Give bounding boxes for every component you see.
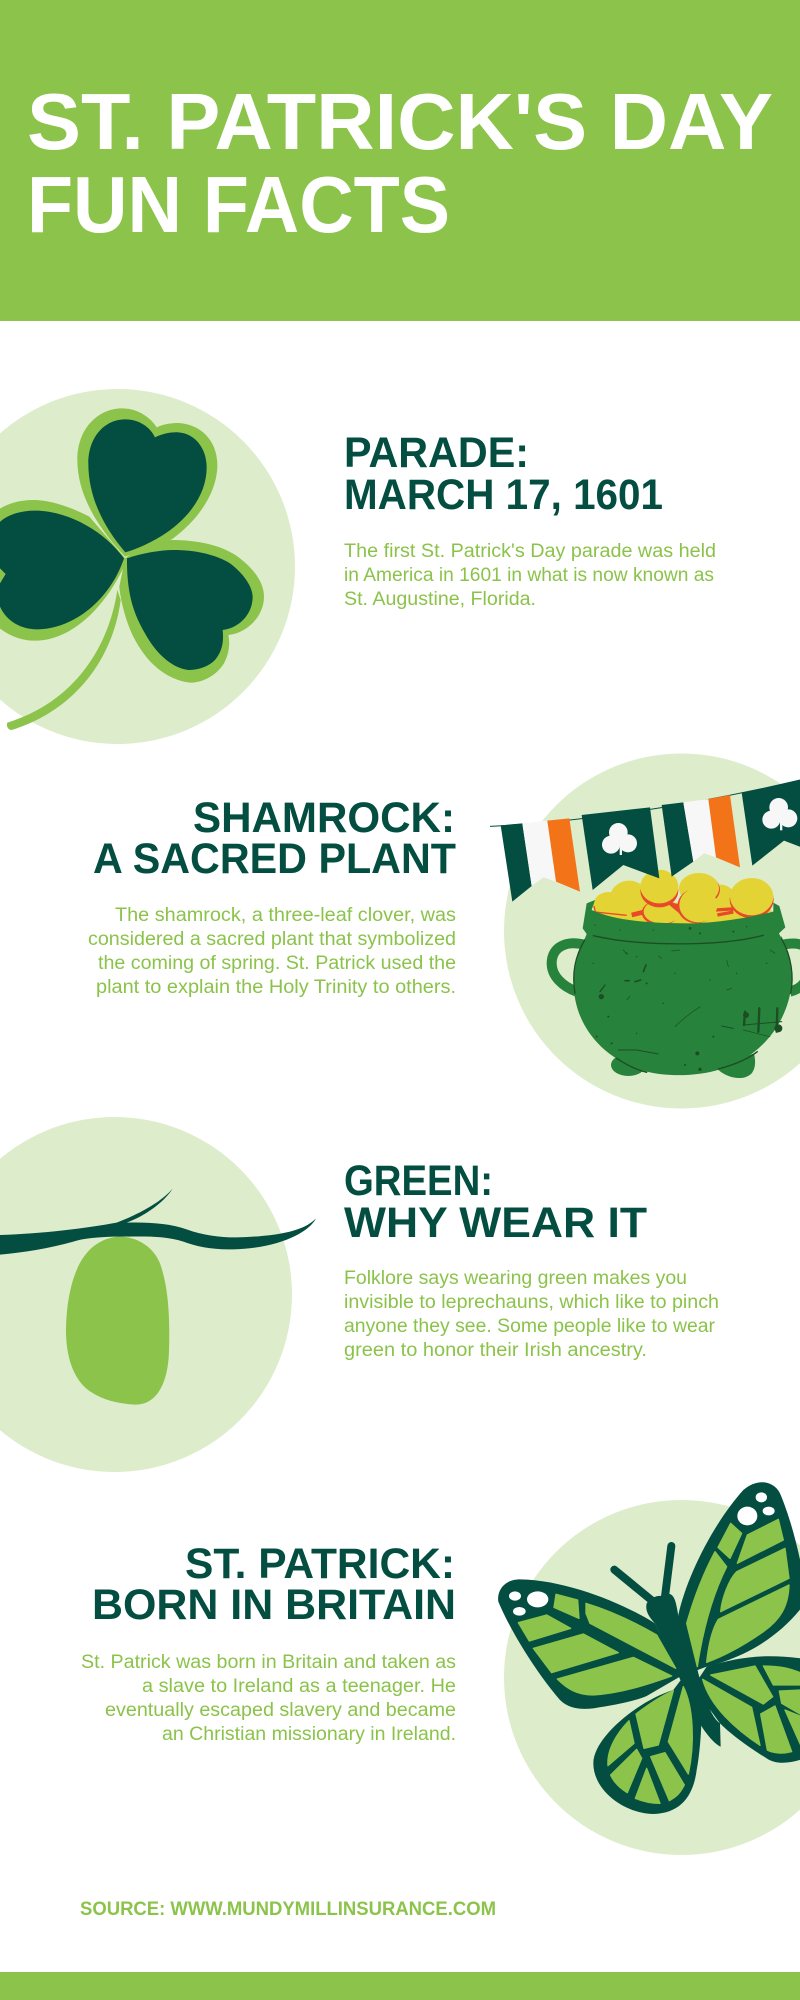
heading: st patrick	[92, 1540, 456, 1629]
heading: parade: MARCH 17, 1601	[344, 471, 663, 519]
icon: pot handles	[552, 943, 800, 992]
icon: pot rim	[583, 900, 785, 945]
icon: chrysalis on branch in circle	[0, 1117, 316, 1472]
icon: tricolor flag	[501, 818, 580, 902]
text: green body: Folklore says wearing green makes you	[344, 1268, 687, 1289]
icon: tricolor flag	[662, 795, 740, 877]
icon: shamrock flag	[742, 780, 800, 866]
heading: parade	[344, 429, 663, 519]
text: parade body: The first St. Patrick's Day parade was held	[344, 541, 716, 562]
icon: pot body	[574, 937, 792, 1075]
text: shamrock body: plant to explain the Holy Trinity to others.	[96, 977, 456, 998]
text: st patrick body: St. Patrick was born in Britain and taken as	[81, 1652, 456, 1673]
text: green body: anyone they see. Some people like to wear	[344, 1316, 716, 1337]
text: green body: invisible to leprechauns, which like to pinch	[344, 1292, 719, 1313]
heading: shamrock	[93, 794, 456, 883]
heading: st patrick: ST. PATRICK:	[185, 1540, 455, 1588]
text: shamrock body: considered a sacred plant that symbolized	[88, 929, 456, 950]
title: ST. PATRICK'S DAY	[27, 77, 773, 166]
icon: shamrock in circle	[0, 389, 295, 744]
text: parade body: St. Augustine, Florida.	[344, 589, 536, 610]
title: FUN FACTS	[27, 160, 450, 249]
panel: green	[0, 1117, 719, 1472]
heading: parade: PARADE:	[344, 429, 529, 477]
text: st patrick body: an Christian missionary in Ireland.	[162, 1724, 456, 1745]
text: shamrock body: The shamrock, a three-leaf clover, was	[115, 905, 456, 926]
icon: bunting string	[490, 780, 800, 826]
text: parade body: in America in 1601 in what is now known as	[344, 565, 714, 586]
heading: green: WHY WEAR IT	[344, 1199, 647, 1247]
text: st patrick body: a slave to Ireland as a teenager. He	[142, 1676, 456, 1697]
icon: butterfly wing panels	[518, 1519, 800, 1803]
panel: parade	[0, 389, 716, 744]
icon: pot dark dots	[593, 924, 782, 1071]
icon: butterfly in circle	[498, 1482, 800, 1855]
text: st patrick body	[81, 1652, 456, 1745]
heading: green: GREEN:	[344, 1157, 493, 1205]
icon: shamrock flag	[582, 807, 659, 890]
icon: butterfly silhouette	[498, 1482, 800, 1814]
text: shamrock body	[88, 905, 456, 998]
heading: green	[344, 1157, 647, 1247]
heading: shamrock: SHAMROCK:	[193, 794, 455, 842]
panel: st patrick	[81, 1482, 800, 1855]
text: parade body	[344, 541, 716, 610]
text: green body: green to honor their Irish ancestry.	[344, 1340, 647, 1361]
source line: SOURCE: WWW.MUNDYMILLINSURANCE.COM	[80, 1899, 496, 1920]
text: st patrick body: eventually escaped slavery and became	[105, 1700, 456, 1721]
text: green body	[344, 1268, 719, 1361]
title	[27, 77, 773, 249]
icon: pot shadows and speckles	[574, 935, 792, 1072]
header band with title	[0, 0, 800, 321]
icon: pot of gold with bunting in circle	[490, 754, 800, 1108]
panel: shamrock	[88, 754, 800, 1108]
icon: gold coins	[591, 870, 774, 925]
text: shamrock body: the coming of spring. St. Patrick used the	[98, 953, 456, 974]
heading: st patrick: BORN IN BRITAIN	[92, 1581, 456, 1629]
heading: shamrock: A SACRED PLANT	[93, 835, 456, 883]
icon: butterfly white spots	[509, 1492, 775, 1616]
icon: pot feet	[611, 1053, 755, 1078]
footer band	[0, 1972, 800, 2000]
